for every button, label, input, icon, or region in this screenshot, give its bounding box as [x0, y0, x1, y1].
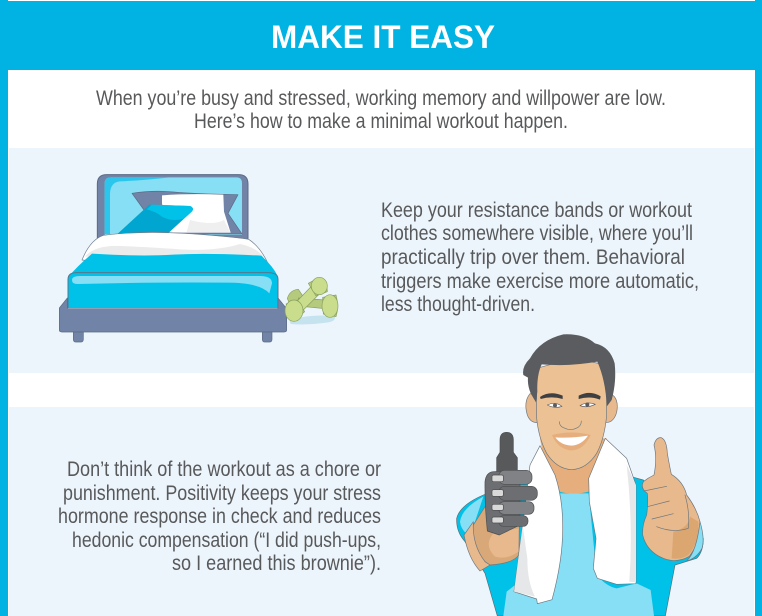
blue blanket	[68, 254, 278, 308]
blue cushion	[117, 205, 193, 234]
right arm sleeve edge	[687, 522, 703, 561]
mouth	[552, 432, 591, 450]
left forearm	[473, 507, 519, 565]
tip text: positivity: hedonic compensation (“I did push-ups,	[72, 529, 381, 552]
blanket highlight	[72, 276, 272, 293]
tip text: resistance bands: clothes somewhere visible, where you’ll	[381, 222, 693, 245]
white pillow	[162, 194, 231, 233]
eyes	[547, 403, 562, 407]
robotic hand	[485, 432, 537, 535]
intro text: When you’re busy and stressed, working memory and willpower are low.	[96, 87, 666, 110]
white sheet	[82, 232, 268, 270]
panel: positivity tip background	[9, 407, 754, 616]
dumbbells	[285, 277, 338, 324]
illustration: bed	[59, 175, 338, 342]
tip text: positivity: hormone response in check and reduces	[58, 505, 381, 528]
left border bar	[0, 0, 8, 616]
back pillow	[132, 191, 242, 234]
intro text: Here’s how to make a minimal workout happen.	[194, 110, 568, 133]
title: MAKE IT EASY	[271, 19, 495, 55]
tip text: positivity: so I earned this brownie”).	[172, 552, 381, 575]
tip text: resistance bands: practically trip over them. Behavioral	[381, 246, 685, 269]
tip text: resistance bands: less thought-driven.	[381, 293, 535, 316]
right hand thumbs up	[642, 438, 700, 561]
panel: header band	[0, 1, 762, 70]
tip text: positivity: Don’t think of the workout as a chore or	[67, 458, 381, 481]
right border bar	[755, 0, 762, 616]
nose	[559, 421, 581, 430]
headboard	[97, 175, 248, 240]
t-shirt	[457, 472, 703, 616]
neck	[540, 438, 607, 494]
illustration: man giving thumbs up	[457, 334, 703, 616]
hair	[523, 334, 615, 407]
intro text	[96, 87, 666, 133]
tip text: resistance bands	[381, 199, 699, 316]
towel right	[589, 438, 636, 584]
bed frame	[59, 298, 287, 332]
eyebrows	[540, 393, 563, 399]
tip text: positivity	[58, 458, 381, 575]
bed leg left	[73, 332, 83, 342]
bed leg right	[262, 332, 272, 342]
tip text: positivity: punishment. Positivity keeps your stress	[63, 482, 381, 505]
tip text: resistance bands: triggers make exercise more automatic,	[381, 270, 699, 293]
ears	[526, 394, 539, 423]
tip text: resistance bands: Keep your resistance bands or workout	[381, 199, 692, 222]
towel left	[514, 446, 563, 604]
face	[537, 358, 607, 470]
panel: bed tip background	[9, 148, 754, 373]
